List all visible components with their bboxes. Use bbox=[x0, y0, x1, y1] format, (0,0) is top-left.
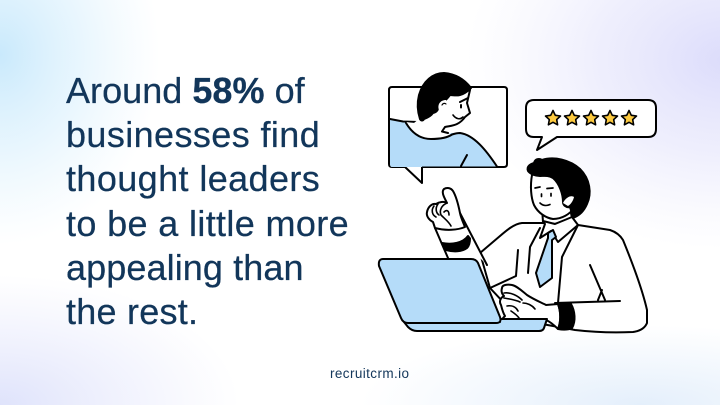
laptop screen bbox=[379, 259, 500, 323]
headline text: to be a little more bbox=[66, 203, 349, 244]
ear bbox=[563, 196, 574, 206]
businessman bbox=[379, 158, 647, 332]
neck bbox=[542, 208, 572, 224]
hand pointing up bbox=[427, 188, 465, 230]
headline text: appealing than bbox=[66, 247, 304, 288]
typing hand bbox=[500, 285, 560, 329]
hair bbox=[528, 158, 590, 218]
eyes, brows and smile bbox=[535, 187, 553, 196]
footer website: recruitcrm.io bbox=[330, 366, 409, 381]
tie bbox=[536, 230, 556, 287]
headline text: Around 58% of bbox=[66, 70, 305, 111]
cuff bbox=[558, 303, 575, 330]
headline text: businesses find bbox=[66, 114, 320, 155]
video call speech bubble with person bbox=[389, 73, 507, 183]
torso and sleeve bbox=[480, 223, 647, 332]
shirt lines bbox=[490, 225, 620, 303]
neck and face bbox=[406, 88, 470, 139]
hair bbox=[418, 73, 471, 120]
rating speech bubble bbox=[526, 100, 656, 150]
headline text: thought leaders bbox=[66, 158, 320, 199]
headline text bbox=[66, 70, 349, 332]
eye and smile bbox=[460, 98, 468, 108]
ear bbox=[438, 100, 447, 111]
wristband bbox=[442, 236, 470, 251]
shirt bbox=[390, 119, 497, 167]
laptop base bbox=[404, 319, 547, 331]
headline text: the rest. bbox=[66, 291, 198, 332]
pointing arm bbox=[435, 200, 487, 265]
face bbox=[531, 165, 576, 219]
five stars bbox=[546, 110, 636, 125]
collar bbox=[540, 217, 578, 242]
